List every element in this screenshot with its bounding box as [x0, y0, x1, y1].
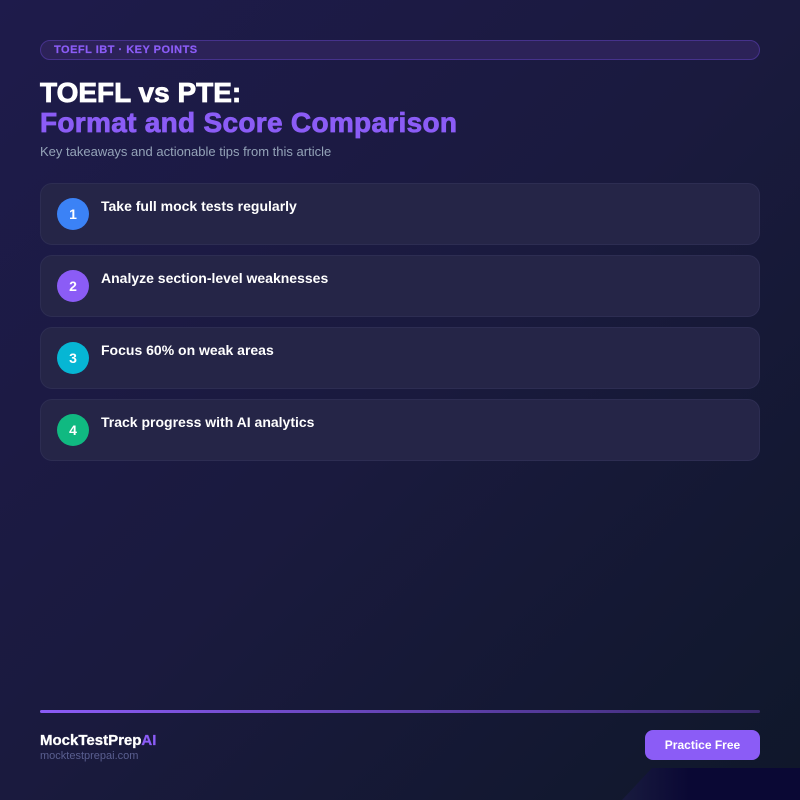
title: Format and Score Comparison — [40, 107, 457, 138]
website URL: mocktestprepai.com — [40, 750, 138, 762]
card 1 text: Take full mock tests regularly — [101, 198, 297, 214]
number badge 3 — [57, 342, 89, 374]
number badge 4: 4 — [69, 422, 77, 438]
number badge 1 — [57, 198, 89, 230]
card 1: take full mock tests — [40, 183, 760, 245]
card 3 text: Focus 60% on weak areas — [101, 342, 274, 358]
brand name: MockTestPrepAI — [40, 732, 156, 749]
title — [40, 77, 457, 138]
card 3: focus on weak areas — [40, 327, 760, 389]
footer gradient rule — [40, 710, 760, 713]
number badge 2: 2 — [69, 278, 77, 294]
card 4: track progress — [40, 399, 760, 461]
call to action button: Practice Free — [665, 738, 740, 752]
title: TOEFL vs PTE: — [40, 77, 241, 108]
card 2 text: Analyze section-level weaknesses — [101, 270, 328, 286]
number badge 2 — [57, 270, 89, 302]
badge: TOEFL iBT key points: TOEFL IBT · KEY POINTS — [54, 44, 198, 56]
subtitle: Key takeaways and actionable tips from this article — [40, 144, 331, 159]
card 2: analyze weaknesses — [40, 255, 760, 317]
badge: TOEFL iBT key points — [40, 40, 760, 60]
number badge 3: 3 — [69, 350, 77, 366]
number badge 4 — [57, 414, 89, 446]
call to action button — [645, 730, 760, 760]
card 4 text: Track progress with AI analytics — [101, 414, 314, 430]
number badge 1: 1 — [69, 206, 77, 222]
